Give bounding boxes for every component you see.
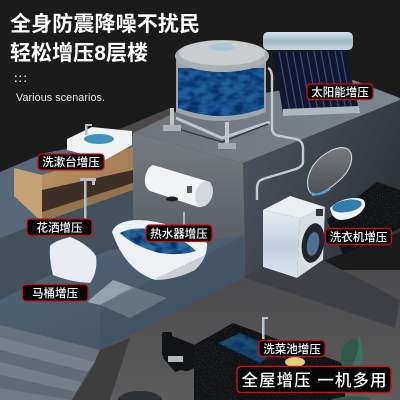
callout: whole house: 全屋增压 一机多用	[242, 370, 386, 390]
gray block top face	[133, 80, 400, 163]
bathroom back wall	[0, 188, 245, 325]
callout: whole house	[237, 366, 391, 392]
label: vanity	[38, 154, 104, 170]
label: vanity: 洗漱台增压	[42, 155, 100, 169]
main title	[10, 12, 200, 65]
water heater	[145, 165, 216, 209]
shower faucet	[80, 178, 96, 230]
label: kitchen sink	[259, 340, 325, 356]
drain	[118, 391, 162, 400]
washer platform	[243, 260, 400, 328]
pressure tank	[163, 40, 270, 149]
vanity sink	[67, 124, 132, 160]
gray block right face	[243, 100, 400, 277]
solar heater	[263, 32, 360, 116]
label: kitchen sink: 洗菜池增压	[263, 342, 321, 356]
bathtub	[112, 212, 207, 280]
label: toilet	[22, 284, 88, 301]
toilet	[50, 237, 96, 283]
bathroom floor	[0, 236, 245, 350]
bottom floor shadow	[72, 338, 130, 400]
subtitle: Various scenarios.	[16, 92, 105, 104]
wood vanity	[14, 147, 133, 222]
washing machine	[263, 196, 327, 278]
label: water heater: 热水器增压	[150, 226, 208, 240]
gray block left face	[133, 133, 245, 250]
label: washing machine	[326, 228, 392, 244]
water pump	[162, 332, 197, 372]
floor mat	[87, 280, 167, 318]
glass partition	[100, 236, 245, 350]
dots icon	[15, 76, 26, 82]
label: shower	[27, 219, 92, 236]
label: solar	[307, 84, 373, 100]
back floor strip	[90, 108, 200, 160]
black counter	[327, 182, 400, 255]
water pipe	[257, 68, 303, 200]
label: toilet: 马桶增压	[32, 286, 78, 300]
washbasin bowl	[330, 197, 365, 220]
label: water heater	[146, 225, 212, 242]
main title: 全身防震降噪不扰民	[10, 12, 200, 36]
label: solar: 太阳能增压	[311, 85, 369, 99]
left blue floor behind counter	[0, 135, 140, 245]
mirror	[308, 148, 352, 195]
stairs	[0, 325, 100, 400]
label: shower: 花洒增压	[36, 220, 83, 234]
main title: 轻松增压8层楼	[10, 42, 148, 65]
label: washing machine: 洗衣机增压	[330, 230, 388, 244]
plant	[330, 334, 370, 400]
lower ground and wall	[0, 270, 400, 400]
kitchen counter	[194, 317, 345, 400]
